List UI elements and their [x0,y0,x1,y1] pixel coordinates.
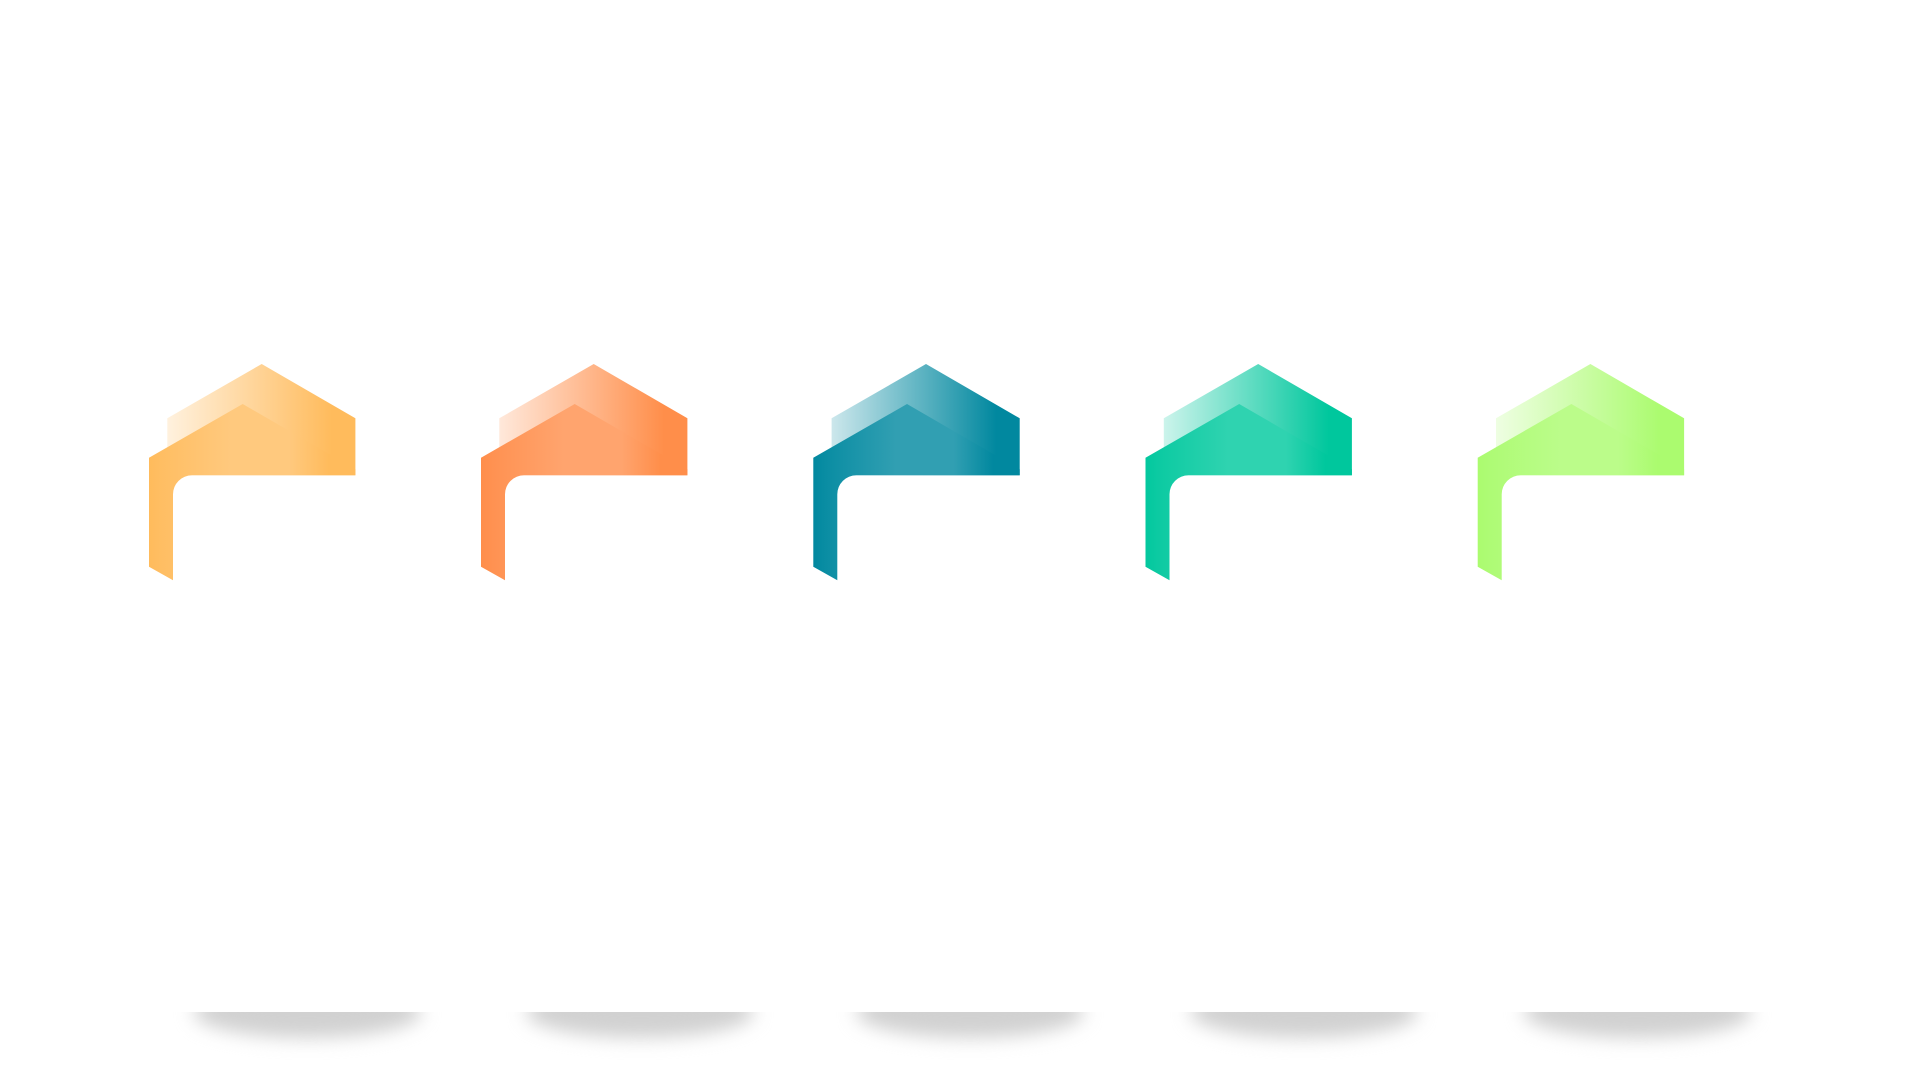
panel 1: yellow-orange house [149,364,355,580]
shadow 1 [189,1012,426,1046]
front roof and wall shape [149,404,355,580]
front roof and wall shape [1478,404,1684,580]
panel 5: lime house [1478,364,1684,580]
back roof shape [167,364,355,475]
back roof shape [832,364,1020,475]
shadow 5 [1519,1012,1756,1046]
back roof shape [1164,364,1352,475]
panel 3: teal house [813,364,1020,580]
panel 2: orange house [481,364,687,580]
shadow 2 [522,1012,758,1046]
front roof and wall shape [813,404,1020,580]
back roof shape [499,364,687,475]
panel 4: green house [1146,364,1352,580]
infographic canvas [149,364,1756,1046]
back roof shape [1496,364,1684,475]
shadow 3 [852,1012,1088,1046]
shadow 4 [1186,1012,1422,1046]
front roof and wall shape [1146,404,1352,580]
front roof and wall shape [481,404,687,580]
